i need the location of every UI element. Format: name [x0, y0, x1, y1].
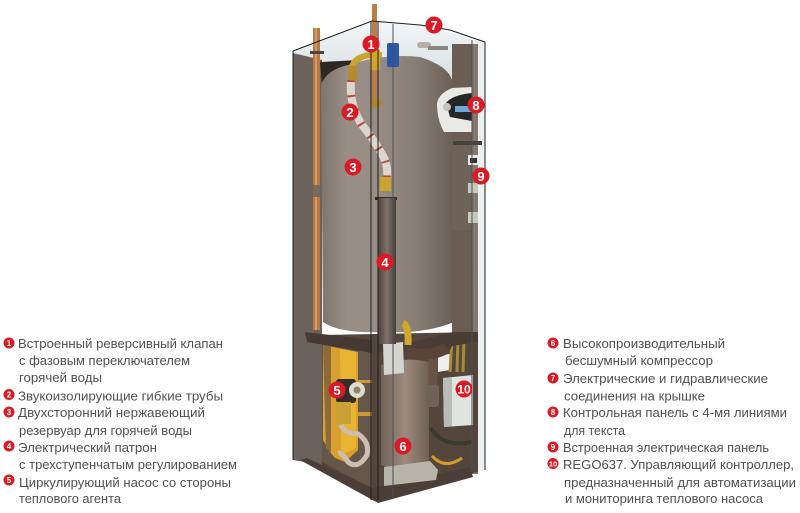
legend item 10: предназначенный для автоматизации — [564, 475, 796, 490]
yellow pump insulation panel — [323, 345, 372, 462]
legend item 10: REGO637. Управляющий контроллер, — [563, 457, 794, 472]
pipe under tank — [405, 348, 447, 354]
legend item 4: с трехступенчатым регулированием — [19, 457, 237, 472]
left legend — [4, 336, 237, 506]
legend item 1: Встроенный реверсивный клапан — [18, 336, 223, 351]
copper pipe centre — [372, 4, 377, 104]
legend item 2: 2 — [7, 390, 12, 400]
legend item 8: Контрольная панель с 4-мя линиями — [563, 405, 787, 420]
callout 6 — [394, 438, 412, 454]
callout 6: 6 — [399, 439, 407, 454]
legend item 8: для текста — [564, 423, 626, 438]
callout 1 — [362, 36, 380, 52]
legend item 2: Звукоизолирующие гибкие трубы — [18, 388, 223, 404]
callout 2 — [342, 104, 358, 120]
legend item 6: 6 — [551, 339, 556, 348]
legend item 8: 8 — [551, 408, 556, 417]
right glass strip — [478, 42, 485, 472]
legend item 10: 10 — [549, 460, 557, 468]
right legend — [548, 336, 796, 506]
legend item 3: 3 — [7, 408, 12, 417]
callout 9: 9 — [477, 169, 485, 184]
circulation pump — [336, 379, 365, 424]
electric cartridge tube — [375, 197, 397, 344]
yellow fitting — [403, 323, 408, 345]
left insulated wall — [293, 53, 322, 465]
bracket on compressor — [383, 342, 404, 375]
callout 3 — [344, 158, 362, 176]
legend item 7: Электрические и гидравлические — [563, 371, 768, 386]
callout 10: 10 — [457, 382, 471, 396]
pipe right of compressor — [428, 358, 438, 402]
wires — [450, 338, 464, 372]
hot water tank — [321, 56, 454, 332]
legend item 7: 7 — [551, 374, 556, 383]
electrical panel terminals — [453, 141, 482, 223]
legend item 8 — [548, 405, 787, 438]
legend item 4: 4 — [7, 442, 12, 451]
callout 4: 4 — [381, 255, 389, 270]
legend item 5: 5 — [7, 476, 12, 485]
ceiling — [293, 21, 485, 80]
lower cabinet body — [322, 332, 478, 497]
white window right bay — [438, 354, 450, 372]
flexible pipes bottom left — [338, 425, 368, 465]
legend item 3 — [4, 405, 205, 438]
right wall strip — [472, 44, 478, 474]
legend item 3: Двухсторонний нержавеющий — [18, 405, 205, 420]
legend item 3: резервуар для горячей воды — [19, 423, 192, 438]
legend item 6: бесшумный компрессор — [565, 353, 713, 368]
glass outline — [293, 21, 485, 500]
legend item 1: горячей воды — [19, 370, 102, 385]
callout 7 — [426, 16, 442, 34]
heat pump unit illustration — [293, 4, 490, 503]
flexible hose — [351, 80, 391, 191]
right electrical column — [452, 44, 473, 375]
callout 10 — [456, 380, 472, 398]
legend item 10 — [548, 457, 796, 506]
legend item 7 — [548, 371, 768, 404]
cable harness — [431, 428, 472, 443]
top connections — [417, 42, 448, 50]
legend item 5 — [4, 474, 231, 506]
callout 5 — [328, 382, 346, 398]
bottom base plate — [300, 458, 473, 503]
valve with brass fitting — [348, 50, 382, 108]
callout 2: 2 — [346, 105, 354, 120]
callout 3: 3 — [349, 160, 357, 175]
legend item 9: Встроенная электрическая панель — [563, 440, 769, 455]
copper pipe left — [313, 28, 320, 330]
legend item 6 — [548, 336, 725, 368]
control panel — [437, 87, 472, 132]
callout 8 — [468, 96, 484, 114]
legend item 1 — [4, 336, 223, 385]
legend item 6: Высокопроизводительный — [563, 336, 725, 351]
legend item 10: и мониторинга теплового насоса — [565, 491, 764, 506]
shelf under tank — [305, 332, 372, 353]
callout 7: 7 — [430, 18, 438, 33]
shadow behind tank top — [320, 60, 360, 85]
callout 5: 5 — [333, 383, 341, 398]
callout 8: 8 — [472, 98, 480, 113]
legend item 5: Циркулирующий насос со стороны — [19, 475, 231, 490]
legend item 7: соединения на крышке — [564, 388, 705, 404]
blue connection box — [387, 43, 399, 67]
callout 1: 1 — [367, 37, 375, 52]
callout 9 — [472, 168, 490, 184]
legend item 4 — [4, 440, 237, 472]
callout 4 — [376, 254, 394, 270]
legend item 4: Электрический патрон — [18, 440, 157, 455]
control box — [443, 375, 473, 427]
legend item 5: теплового агента — [19, 491, 122, 506]
legend item 9: 9 — [551, 443, 556, 452]
legend item 1: с фазовым переключателем — [19, 353, 190, 368]
legend item 1: 1 — [7, 339, 12, 348]
compressor — [381, 360, 429, 469]
lower left dark bay — [322, 345, 372, 488]
